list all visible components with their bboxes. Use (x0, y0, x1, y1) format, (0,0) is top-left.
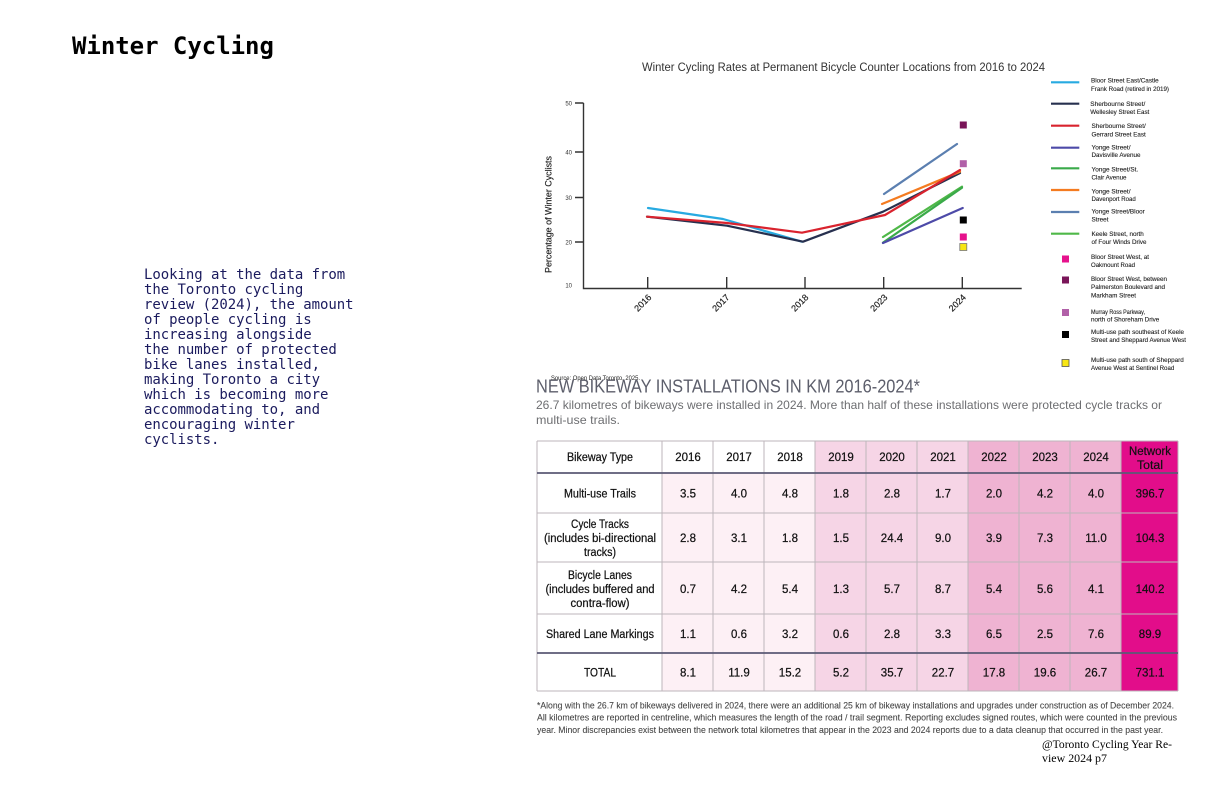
chart legend: Wellesley Street East (1090, 109, 1150, 116)
chart legend: Gerrard Street East (1092, 132, 1146, 138)
header row: Bikeway Type (567, 452, 633, 464)
row: cycle tracks: 3.1 (731, 533, 747, 545)
chart legend: Davisville Avenue (1092, 152, 1141, 159)
row: shared lane markings: 3.2 (782, 629, 798, 641)
text block: summary: encouraging winter (144, 417, 295, 433)
chart legend: Markham Street (1091, 292, 1136, 300)
y axis title: Percentage of Winter Cyclists (544, 156, 554, 273)
chart legend: Bloor Street West, at (1091, 254, 1149, 261)
row: cycle tracks (544, 519, 1164, 559)
x axis labels: 2023 (868, 292, 889, 313)
chart axes (575, 103, 1022, 288)
chart legend: Sherbourne Street/ (1090, 101, 1146, 108)
attribution: view 2024 p7 (1042, 753, 1107, 765)
row: multi-use trails: 2.0 (986, 488, 1002, 500)
text block: summary: which is becoming more (144, 387, 328, 403)
row: multi-use trails: 1.7 (935, 488, 951, 500)
header row: 2020 (879, 452, 905, 464)
row: bicycle lanes: 140.2 (1136, 584, 1164, 596)
row: cycle tracks: 3.9 (986, 533, 1002, 545)
attribution: @Toronto Cycling Year Re- (1042, 739, 1172, 751)
row: multi-use trails: 2.8 (884, 488, 900, 500)
y axis labels (565, 102, 573, 290)
chart legend: Bloor Street East/Castle (1091, 78, 1159, 84)
chart legend: Keele Street, north (1092, 231, 1144, 238)
header row: 2016 (675, 452, 701, 464)
row: total: TOTAL (584, 668, 617, 680)
chart legend: Multi-use path southeast of Keele (1091, 329, 1184, 336)
x axis labels: 2016 (632, 292, 653, 313)
title: Winter Cycling (72, 32, 274, 60)
row: multi-use trails: 1.8 (833, 488, 849, 500)
row: total: 19.6 (1034, 668, 1056, 680)
header row: 2018 (777, 452, 803, 464)
row: multi-use trails: 396.7 (1136, 488, 1164, 500)
row: bicycle lanes: 4.1 (1088, 584, 1104, 596)
row: cycle tracks: 2.8 (680, 533, 696, 545)
table: bikeway installations (537, 441, 1178, 691)
row: shared lane markings: 2.5 (1037, 629, 1053, 641)
table footnote: All kilometres are reported in centreline, which measures the length of the road / trail segment. Reporting excludes signed routes, which were counted in the previous (537, 712, 1177, 722)
x axis labels: 2024 (947, 292, 968, 313)
row: cycle tracks: Cycle Tracks (571, 519, 629, 531)
text block: summary: making Toronto a city (144, 372, 320, 388)
header row: 2019 (828, 452, 854, 464)
y axis labels: 10 (565, 284, 573, 290)
chart legend: Yonge Street/St. (1092, 166, 1138, 174)
row: cycle tracks: 24.4 (881, 533, 904, 545)
row: shared lane markings: 7.6 (1088, 629, 1104, 641)
row: shared lane markings: Shared Lane Markings (546, 629, 654, 641)
row: bicycle lanes: 5.4 (782, 584, 799, 596)
row: shared lane markings: 89.9 (1139, 629, 1161, 641)
header row: 2023 (1032, 452, 1058, 464)
chart legend: Street (1092, 216, 1109, 224)
x axis labels: 2017 (710, 292, 731, 313)
row: total: 731.1 (1136, 668, 1164, 680)
row: shared lane markings: 2.8 (884, 629, 900, 641)
row: total: 22.7 (932, 668, 954, 680)
row: total: 11.9 (728, 668, 750, 680)
row: shared lane markings: 0.6 (731, 629, 747, 641)
row: total (584, 668, 1164, 680)
row: multi-use trails: 4.8 (782, 488, 798, 500)
text block: summary: the Toronto cycling (144, 282, 303, 298)
chart legend: Bloor Street West, between (1091, 276, 1167, 283)
text block: summary (144, 267, 353, 448)
chart title: Winter Cycling Rates at Permanent Bicycle Counter Locations from 2016 to 2024 (642, 62, 1046, 74)
row: cycle tracks: 1.8 (782, 533, 798, 545)
row: total: 15.2 (779, 668, 801, 680)
row: bicycle lanes: 4.2 (731, 584, 747, 596)
text block: summary: review (2024), the amount (144, 297, 353, 313)
text block: summary: of people cycling is (144, 312, 312, 328)
table description (536, 398, 1162, 427)
row: total: 8.1 (680, 668, 696, 680)
text block: summary: cyclists. (144, 432, 219, 448)
header row (567, 446, 1171, 472)
row: total: 5.2 (833, 668, 849, 680)
chart legend: Yonge Street/Bloor (1092, 208, 1146, 216)
row: bicycle lanes: 0.7 (680, 584, 696, 596)
table footnote: year. Minor discrepancies exist between the network total kilometres that appear in the 2023 and 2024 reports due to a data cleanup that occurred in the past year. (537, 725, 1163, 735)
table description: multi-use trails. (536, 413, 620, 427)
chart legend: Oakmount Road (1091, 262, 1135, 269)
row: multi-use trails: 3.5 (680, 488, 696, 500)
row: multi-use trails: 4.0 (731, 488, 747, 500)
chart legend: of Four Winds Drive (1092, 239, 1147, 246)
row: bicycle lanes: 1.3 (833, 584, 849, 596)
y axis labels: 50 (565, 102, 573, 108)
x axis labels (632, 292, 968, 313)
y axis labels: 40 (565, 150, 573, 156)
row: shared lane markings: 3.3 (935, 629, 951, 641)
row: bicycle lanes: 8.7 (935, 584, 951, 596)
row: total: 26.7 (1085, 668, 1107, 680)
text block: summary: bike lanes installed, (144, 357, 320, 373)
text block: summary: the number of protected (144, 342, 337, 358)
chart source: Source: Open Data Toronto, 2025. (551, 375, 640, 382)
chart legend: north of Shoreham Drive (1091, 316, 1160, 324)
chart legend: Yonge Street/ (1092, 188, 1131, 196)
attribution (1042, 739, 1172, 765)
row: bicycle lanes: contra-flow) (570, 598, 630, 610)
chart legend: Sherbourne Street/ (1092, 123, 1146, 130)
chart legend: Clair Avenue (1092, 174, 1127, 182)
row: cycle tracks: 11.0 (1085, 533, 1107, 545)
chart legend: Avenue West at Sentinel Road (1091, 365, 1175, 372)
row: cycle tracks: 9.0 (935, 533, 951, 545)
row: total: 17.8 (983, 668, 1005, 680)
row: multi-use trails: 4.0 (1088, 488, 1104, 500)
row: bicycle lanes (546, 570, 1164, 610)
row: multi-use trails: 4.2 (1037, 488, 1053, 500)
header row: 2017 (726, 452, 752, 464)
y axis labels: 30 (565, 196, 573, 202)
row: shared lane markings (546, 629, 1161, 641)
row: bicycle lanes: Bicycle Lanes (568, 570, 632, 582)
row: bicycle lanes: 5.6 (1037, 584, 1053, 596)
row: shared lane markings: 1.1 (680, 629, 696, 641)
row: cycle tracks: (includes bi-directional (544, 533, 656, 545)
text block: summary: Looking at the data from (144, 267, 345, 283)
header row: Total (1137, 460, 1163, 472)
text block: summary: accommodating to, and (144, 402, 320, 418)
x axis labels: 2018 (789, 292, 810, 313)
line chart (544, 102, 1022, 313)
header row: 2021 (930, 452, 956, 464)
chart legend: Street and Sheppard Avenue West (1091, 337, 1186, 344)
table description: 26.7 kilometres of bikeways were installed in 2024. More than half of these installations were protected cycle tracks or (536, 398, 1162, 412)
chart legend (1051, 78, 1186, 372)
table footnote: *Along with the 26.7 km of bikeways delivered in 2024, there were an additional 25 km of bikeway installations and upgrades under construction as of December 2024. (537, 700, 1174, 710)
data lines (647, 144, 963, 243)
row: bicycle lanes: 5.4 (986, 584, 1003, 596)
row: bicycle lanes: 5.7 (884, 584, 900, 596)
row: cycle tracks: tracks) (584, 547, 616, 559)
header row: 2024 (1083, 452, 1109, 464)
chart legend: Yonge Street/ (1092, 144, 1131, 152)
chart legend: Frank Road (retired in 2019) (1091, 86, 1169, 93)
chart legend: Murray Ross Parkway, (1091, 309, 1145, 316)
row: cycle tracks: 1.5 (833, 533, 849, 545)
text block: summary: increasing alongside (144, 327, 312, 343)
row: cycle tracks: 104.3 (1136, 533, 1164, 545)
chart legend: Davenport Road (1092, 196, 1136, 203)
table heading: NEW BIKEWAY INSTALLATIONS IN KM 2016-2024* (536, 376, 920, 396)
row: multi-use trails: Multi-use Trails (564, 488, 636, 500)
row: cycle tracks: 7.3 (1037, 533, 1053, 545)
table column shading (537, 441, 1178, 691)
data markers (960, 122, 967, 250)
y axis labels: 20 (565, 240, 573, 246)
row: bicycle lanes: (includes buffered and (546, 584, 654, 596)
table footnote (537, 700, 1177, 735)
header row: Network (1129, 446, 1171, 458)
chart legend: Palmerston Boulevard and (1091, 284, 1165, 291)
row: shared lane markings: 0.6 (833, 629, 849, 641)
row: total: 35.7 (881, 668, 903, 680)
chart legend: Multi-use path south of Sheppard (1091, 357, 1184, 364)
row: multi-use trails (564, 488, 1164, 500)
row: shared lane markings: 6.5 (986, 629, 1002, 641)
header row: 2022 (981, 452, 1007, 464)
